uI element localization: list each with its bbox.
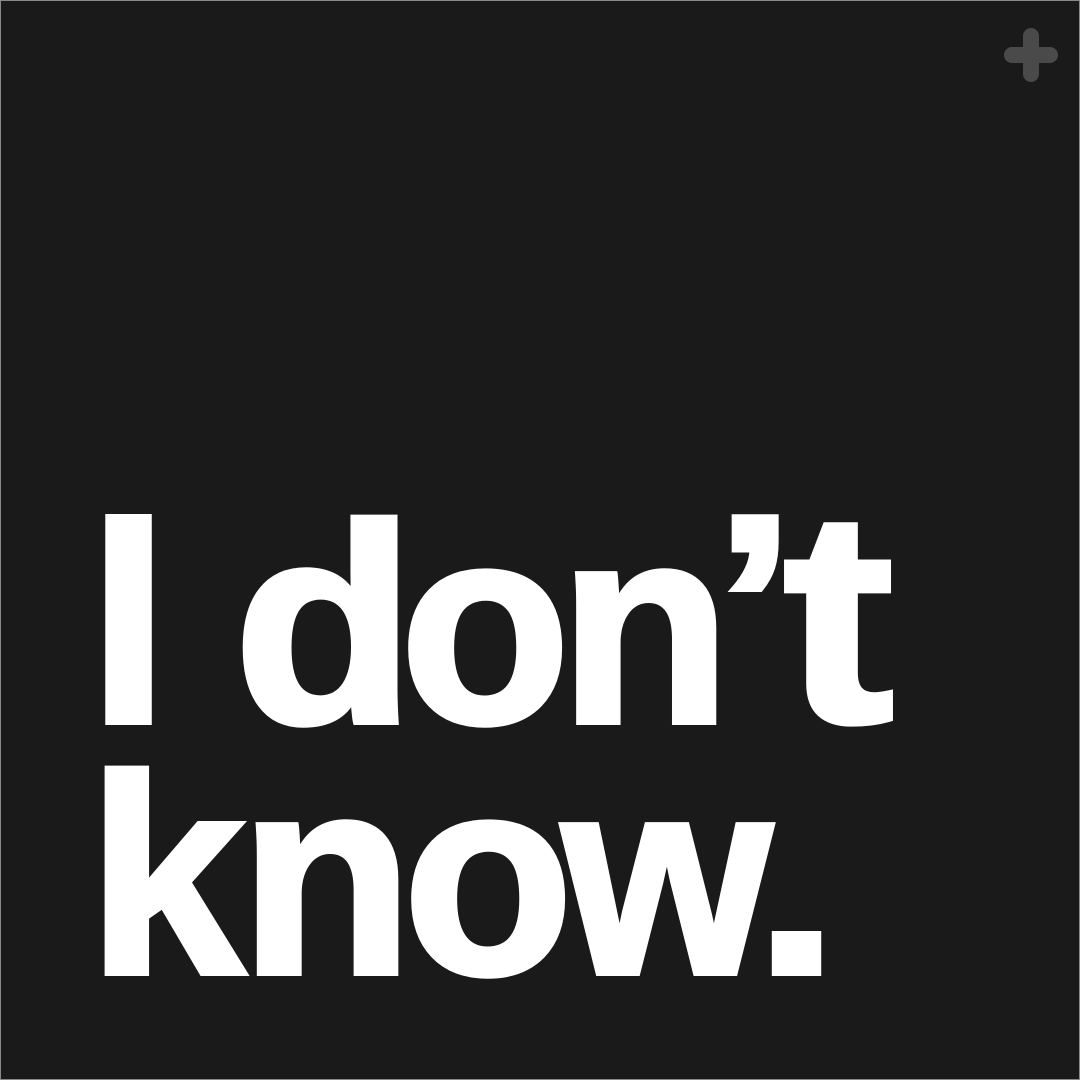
heading: I don't know.: k	[88, 717, 246, 1033]
heading: I don't know.: n	[240, 719, 413, 1033]
heading: I don't know.: d	[234, 468, 415, 782]
heading: I don't know.: w	[558, 721, 772, 1033]
heading: I don't know.: o	[403, 721, 573, 1033]
heading: I don't know.: o	[400, 470, 570, 782]
heading: I don't know.: .	[755, 735, 839, 1029]
heading: I don't know.: I	[89, 452, 168, 786]
heading: I don't know.: ’	[715, 463, 795, 746]
heading: I don't know.: t	[783, 450, 894, 785]
heading: I don't know.	[88, 450, 894, 1033]
heading: I don't know.: n	[560, 470, 731, 782]
icon: plus	[1004, 28, 1058, 82]
